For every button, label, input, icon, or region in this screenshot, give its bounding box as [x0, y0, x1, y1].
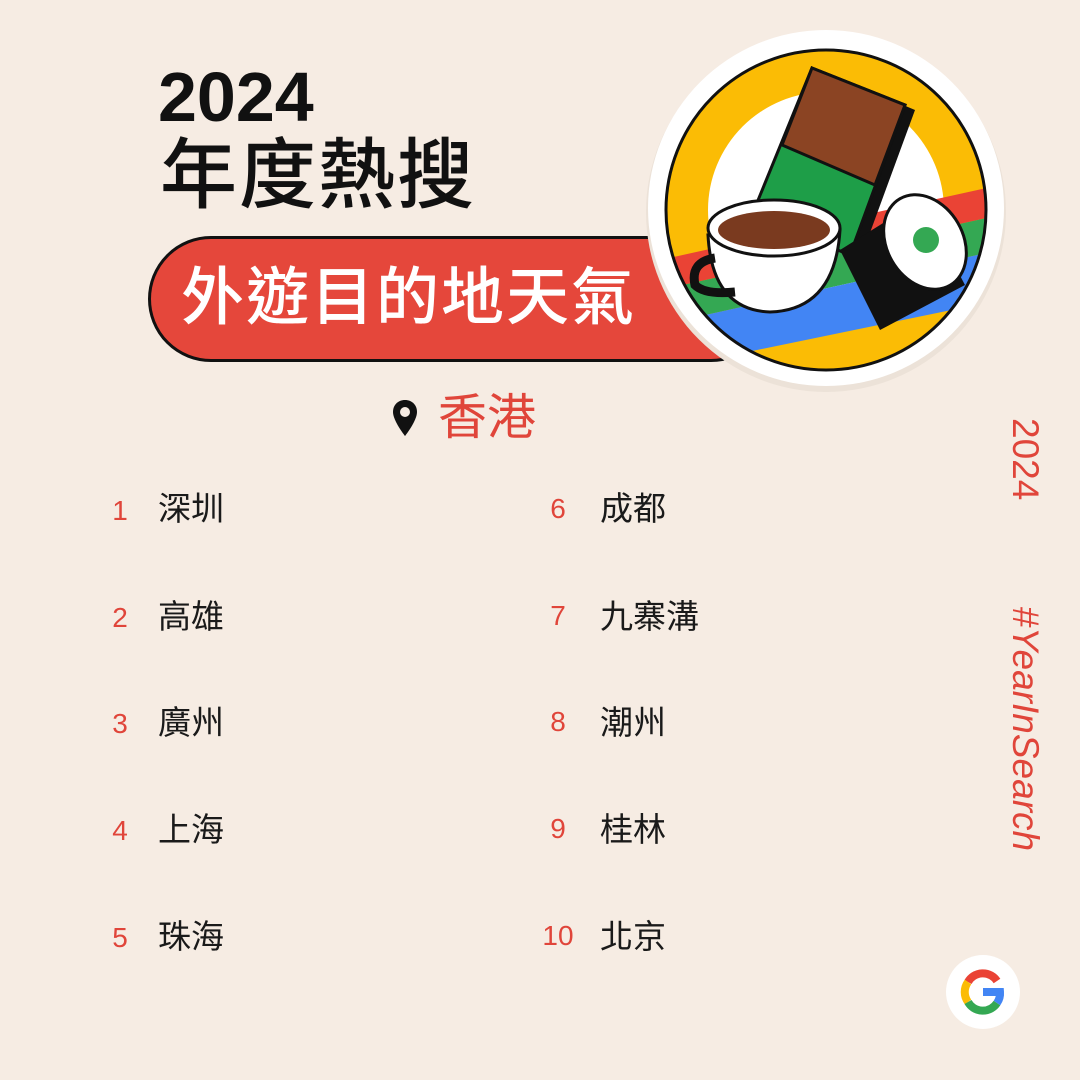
list left column: 2: [112, 602, 128, 633]
list left column: 深圳: [158, 490, 224, 527]
list left column: 珠海: [158, 918, 224, 955]
chocolate bar: [760, 70, 915, 260]
icon: Google G logo: [946, 955, 1020, 1029]
illustration: food badge: [646, 30, 1006, 392]
title: 2024: 2024: [158, 58, 314, 136]
list right column: 北京: [600, 918, 666, 955]
list right column: 桂林: [600, 811, 666, 848]
list left column: 上海: [158, 811, 224, 848]
list left column: 1: [112, 495, 128, 526]
vertical hashtag text: 2024 #YearInSearch: [1005, 418, 1046, 851]
coffee cup: [708, 230, 840, 312]
icon: pin: [393, 400, 417, 436]
list right column: 成都: [600, 490, 666, 527]
location: pin + 香港: 香港: [438, 391, 536, 445]
list right column: 8: [550, 706, 566, 737]
list left column: [112, 490, 224, 955]
title: 年度熱搜: 年度熱搜: [160, 133, 476, 219]
list right column: 6: [550, 493, 566, 524]
red pill heading: [148, 236, 774, 362]
list right column: [542, 490, 699, 955]
sushi roll: [840, 200, 965, 330]
list left column: 3: [112, 708, 128, 739]
list right column: 7: [550, 600, 566, 631]
location: pin + 香港: [393, 391, 536, 445]
list right column: 潮州: [600, 704, 666, 741]
list right column: 10: [542, 920, 574, 951]
red pill heading: 外遊目的地天氣: [181, 263, 636, 333]
list left column: 高雄: [158, 598, 224, 635]
list left column: 廣州: [158, 704, 224, 741]
list right column: 9: [550, 813, 566, 844]
list right column: 九寨溝: [600, 598, 699, 635]
list left column: 5: [112, 922, 128, 953]
list left column: 4: [112, 815, 128, 846]
